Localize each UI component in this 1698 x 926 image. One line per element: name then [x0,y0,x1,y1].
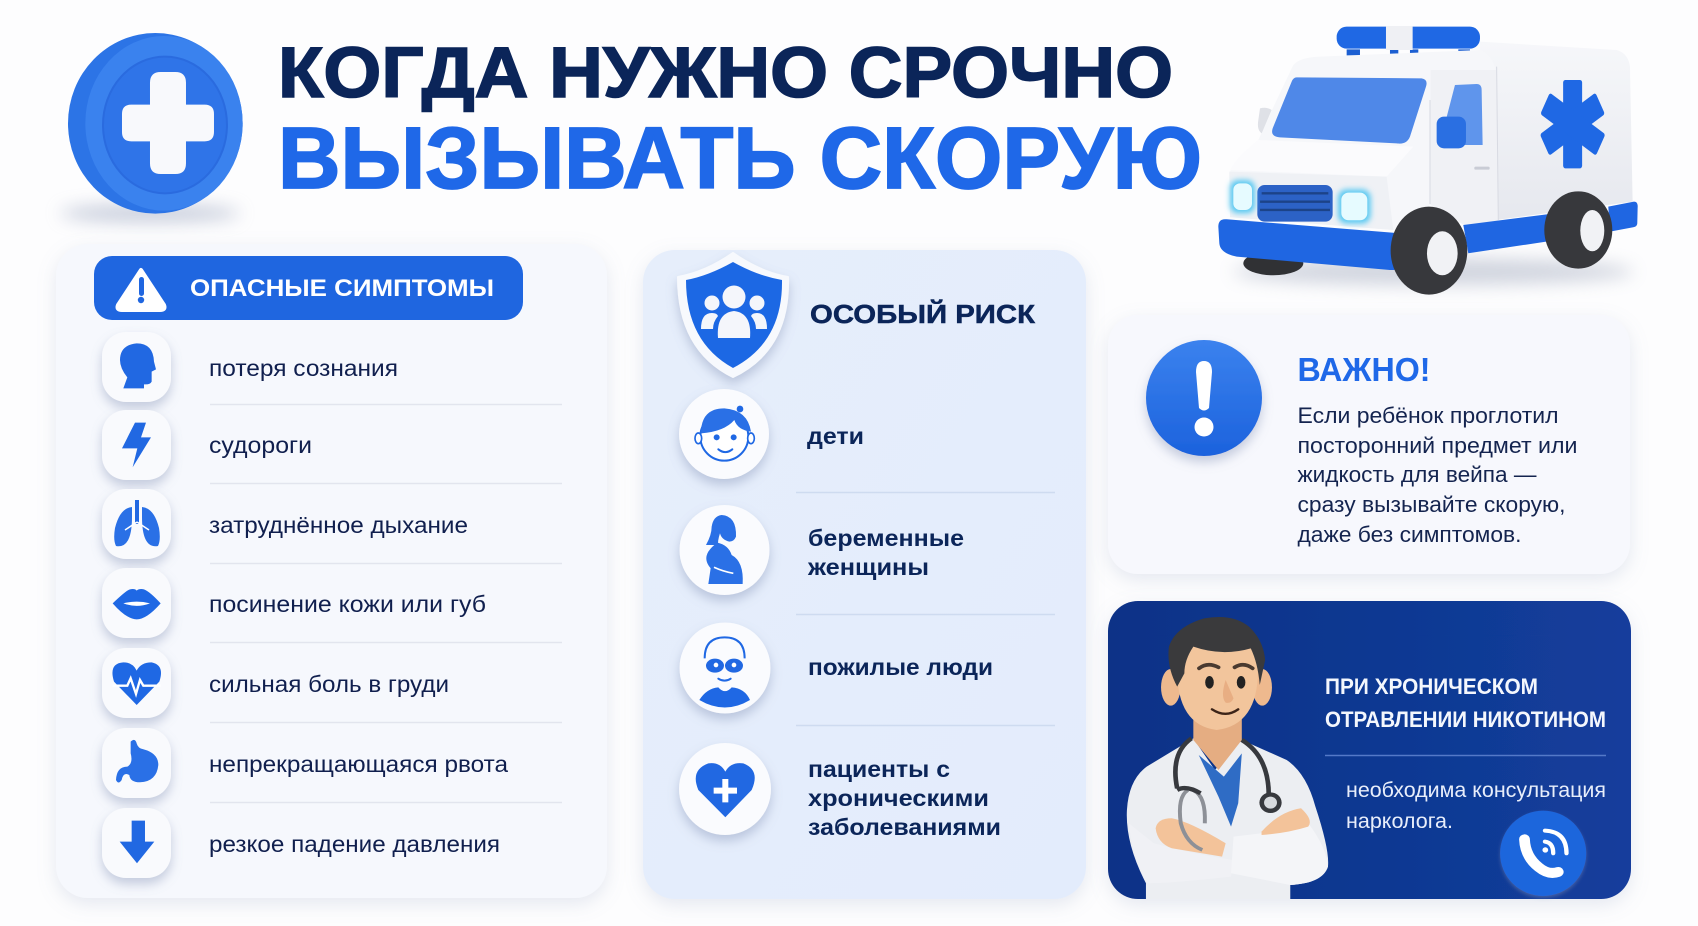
body text: необходима консультация [1346,778,1606,802]
body text: даже без симптомов. [1298,522,1522,547]
illustration: doctor [1127,617,1328,899]
icon: warning triangle [118,270,164,310]
symptom: vomiting [102,728,508,798]
icon: phone button [1500,811,1586,896]
risk: chronic patients [679,743,1001,840]
symptom: loss of consciousness [102,332,398,402]
illustration: ambulance [1218,26,1638,295]
panel: important [1108,315,1630,574]
heading: ОТРАВЛЕНИИ НИКОТИНОМ [1325,707,1606,732]
heading: ПРИ ХРОНИЧЕСКОМ [1325,674,1538,699]
icon: shield with people [678,253,788,377]
symptom: seizures: судороги [209,432,312,458]
symptom: sudden pressure drop: резкое падение давления [209,831,500,857]
symptom: vomiting: непрекращающаяся рвота [209,751,508,777]
risk: chronic patients: заболеваниями [808,814,1001,840]
heading: ОСОБЫЙ РИСК [810,299,1035,329]
body text: сразу вызывайте скорую, [1298,492,1566,517]
title line 1: КОГДА НУЖНО СРОЧНО [278,34,1173,113]
panel: dangerous symptoms [56,244,607,898]
body text: посторонний предмет или [1298,433,1578,458]
symptom: difficulty breathing [102,489,468,559]
symptom: loss of consciousness: потеря сознания [209,355,398,381]
panel: chronic nicotine poisoning [1108,601,1631,899]
heading pill [94,256,523,320]
risk: elderly [680,622,993,714]
body text: жидкость для вейпа — [1298,462,1536,487]
risk: elderly: пожилые люди [808,654,993,680]
risk: pregnant women [680,505,964,595]
risk: pregnant women: беременные [808,525,964,551]
risk: chronic patients: хроническими [808,785,989,811]
heading text: ОПАСНЫЕ СИМПТОМЫ [190,275,494,302]
symptom: seizures [102,410,312,480]
title [278,34,1202,207]
symptom: blue lips: посинение кожи или губ [209,591,486,617]
title line 2: ВЫЗЫВАТЬ СКОРУЮ [278,110,1202,207]
body text: Если ребёнок проглотил [1298,403,1558,428]
icon: blue coin with medical cross [60,33,243,222]
symptom: chest pain [102,648,449,718]
symptom: chest pain: сильная боль в груди [209,671,449,697]
risk: children [679,389,864,479]
panel: special risk [643,250,1086,899]
icon: exclamation circle [1146,340,1262,456]
symptom: sudden pressure drop [102,808,500,878]
risk: chronic patients: пациенты с [808,756,950,782]
body text: нарколога. [1346,809,1453,833]
risk: pregnant women: женщины [807,554,929,580]
heading: ВАЖНО! [1298,351,1430,388]
symptom: blue lips [102,568,486,638]
symptom: difficulty breathing: затруднённое дыхание [209,512,468,538]
risk: children: дети [807,423,864,449]
